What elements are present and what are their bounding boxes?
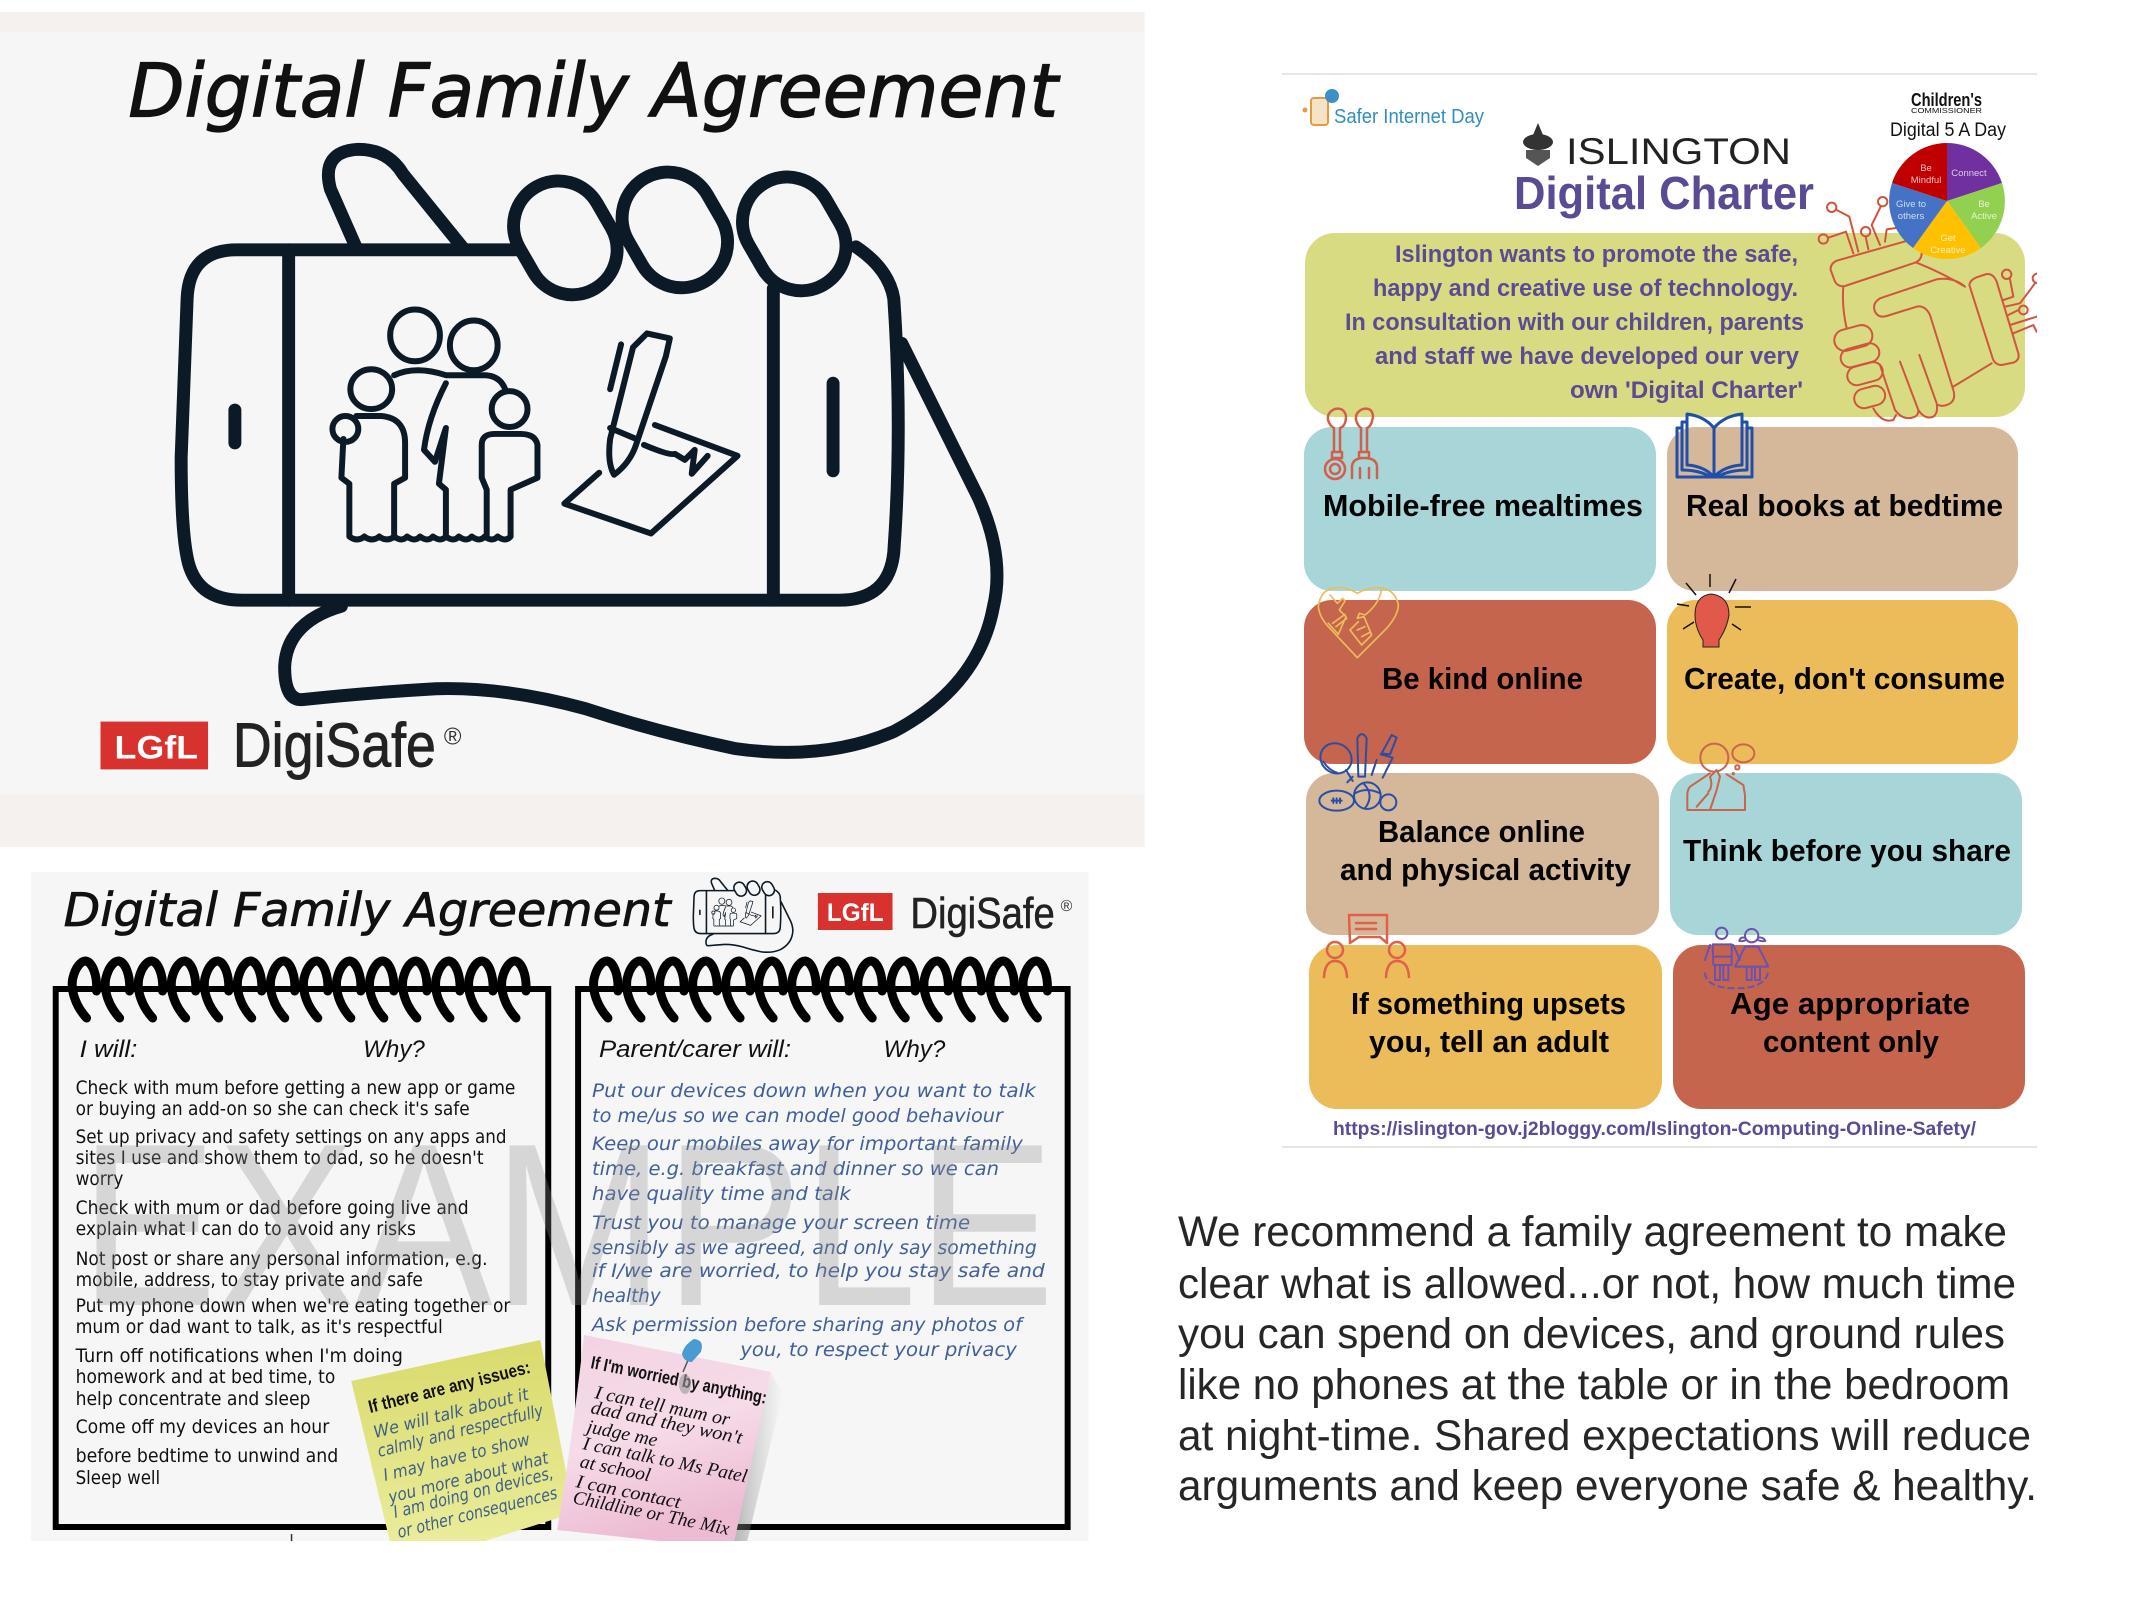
card: Create, don't consume — [1667, 600, 2018, 764]
text: child promises: mum or dad want to talk, as it's respectful — [76, 1316, 443, 1338]
text block: recommendation paragraph — [1178, 1208, 2037, 1510]
logo: ISLINGTON wordmark: ISLINGTON — [1566, 131, 1791, 172]
icon: spoon and fork — [1325, 409, 1377, 479]
logo: LGfL badge — [101, 722, 208, 769]
heading: sheet title: Digital Family Agreement — [64, 883, 673, 937]
icon part: thumb — [328, 149, 463, 248]
text: banner lines: own 'Digital Charter' — [1570, 377, 1803, 404]
card: Think before you share: Think before you share — [1683, 833, 2011, 868]
card: Age appropriate content only — [1673, 945, 2025, 1109]
card: Real books at bedtime: Real books at bedtime — [1686, 488, 2003, 523]
text: child promises: Put my phone down when we're eating together or — [76, 1295, 511, 1317]
pie slice: Be Active: Be — [1978, 199, 1990, 210]
text: pink note lines: dad and they won't — [589, 1397, 745, 1449]
decorative coil: parent notepad spiral — [594, 961, 1047, 1018]
text block: recommendation paragraph: We recommend a family agreement to make — [1178, 1208, 2007, 1256]
icon part: pen and signed paper — [564, 333, 738, 533]
text: right why header: Why? — [884, 1036, 946, 1063]
text: child promises: Check with mum or dad before going live and — [76, 1197, 469, 1219]
panel: top agreement poster — [0, 12, 1145, 847]
logo: Children's Commissioner: COMMISSIONER — [1911, 108, 1982, 115]
note: yellow sticky note — [351, 1340, 574, 1542]
logo: small registered mark: ® — [1061, 898, 1073, 915]
logo: Children's Commissioner: Children's — [1911, 90, 1982, 110]
panel: example agreement sheet — [31, 872, 1089, 1542]
icon: open book — [1677, 414, 1752, 477]
link: blog URL: https://islington-gov.j2bloggy.com/Islington-Computing-Online-Safety/ — [1333, 1119, 1977, 1140]
pie slice: Give to others — [1889, 183, 1947, 248]
text: parent promises: if I/we are worried, to help you stay safe and — [592, 1260, 1046, 1282]
text: pink note lines — [571, 1382, 749, 1540]
pie slice: Be Mindful: Be — [1920, 163, 1932, 174]
text: yellow note heading: If there are any issues: — [366, 1357, 532, 1417]
card: If something upsets you, tell an adult — [1309, 945, 1662, 1109]
card: Balance online and physical activity: Balance online — [1378, 814, 1585, 849]
icon: hand holding phone with family and signature — [181, 149, 997, 752]
icon: Islington crest — [1523, 123, 1553, 166]
text: pink note lines: at school — [578, 1451, 652, 1486]
pie slice: Get Creative: Creative — [1930, 245, 1966, 256]
text: child promises — [75, 1077, 515, 1489]
watermark: EXAMPLE: EXAMPLE — [80, 1096, 1055, 1355]
logo: DigiSafe wordmark: DigiSafe — [233, 711, 436, 780]
text: child promises: homework and at bed time, to — [76, 1366, 335, 1388]
text: yellow note lines: calmly and respectfully — [375, 1400, 546, 1461]
text block: recommendation paragraph: you can spend on devices, and ground rules — [1178, 1310, 2005, 1358]
text: Digital 5 A Day: Digital 5 A Day — [1890, 120, 2006, 141]
logo: small LGfL badge: LGfL — [827, 899, 884, 927]
panel: child notepad — [56, 961, 548, 1527]
icon: blue push pin — [679, 1339, 702, 1394]
logo: Children's Commissioner — [1912, 92, 1982, 113]
pie slice: Connect: Connect — [1951, 168, 1987, 179]
icon part: phone slots — [235, 383, 833, 471]
text block: recommendation paragraph: clear what is allowed...or not, how much time — [1178, 1260, 2016, 1308]
text: parent promises — [590, 1080, 1046, 1361]
text block: recommendation paragraph: at night-time. Shared expectations will reduce — [1178, 1412, 2031, 1460]
text: parent promises: time, e.g. breakfast and dinner so we can — [592, 1158, 999, 1180]
text: pink note lines: Childline or The Mix — [571, 1487, 732, 1540]
icon: two people talking — [1324, 915, 1409, 977]
text: parent promises: sensibly as we agreed, and only say something — [592, 1237, 1037, 1259]
text: child promises: before bedtime to unwind and — [76, 1445, 338, 1467]
text: Safer Internet Day: Safer Internet Day — [1334, 106, 1484, 128]
text: yellow note lines — [371, 1383, 559, 1542]
icon part: family figures — [332, 310, 537, 539]
icon part: phone body — [181, 247, 898, 600]
text: parent promises: Keep our mobiles away for important family — [592, 1133, 1024, 1155]
icon part: fingers — [497, 155, 862, 311]
text: parent promises: Put our devices down when you want to talk — [592, 1080, 1037, 1102]
text: child promises: Sleep well — [76, 1467, 160, 1489]
icon: thinking person — [1687, 744, 1754, 810]
pie slice: Get Creative: Get — [1940, 233, 1956, 244]
text: parent promises: Ask permission before sharing any photos of — [590, 1314, 1025, 1336]
text: child promises: Not post or share any personal information, e.g. — [76, 1248, 488, 1270]
text: pink note lines: I can contact — [573, 1471, 683, 1513]
logo: small DigiSafe wordmark: DigiSafe — [910, 889, 1055, 938]
text: yellow note lines: I am doing on devices, — [391, 1463, 555, 1522]
card: Think before you share — [1670, 773, 2022, 935]
text block: recommendation paragraph: arguments and keep everyone safe & healthy. — [1178, 1462, 2037, 1510]
text: child promises: sites I use and show them to dad, so he doesn't — [76, 1147, 484, 1169]
card: Mobile-free mealtimes: Mobile-free mealtimes — [1323, 488, 1643, 523]
pie slice: Be Mindful: Mindful — [1911, 175, 1941, 186]
icon: heart of hands — [1318, 588, 1398, 658]
logo: LGfL badge: LGfL — [114, 728, 198, 765]
chart: Digital 5 A Day pie — [1889, 143, 2005, 259]
card: Age appropriate content only: content only — [1763, 1024, 1940, 1059]
text: pink note lines: judge me — [582, 1416, 659, 1451]
heading: poster title: Digital Family Agreement — [128, 49, 1061, 134]
text: banner lines: In consultation with our children, parents — [1345, 309, 1804, 336]
card: Create, don't consume: Create, don't consume — [1684, 661, 2005, 696]
heading: Digital Charter: Digital Charter — [1514, 167, 1814, 219]
text: child promises: explain what I can do to avoid any risks — [76, 1218, 416, 1240]
pie slice: Be Mindful — [1892, 143, 1947, 201]
decorative: cut-off footer tick — [291, 1534, 293, 1541]
text: yellow note lines: We will talk about it — [371, 1383, 532, 1442]
logo: registered mark: ® — [444, 723, 462, 750]
card: If something upsets you, tell an adult: If something upsets — [1351, 986, 1626, 1021]
panel: Islington digital charter — [1282, 74, 2042, 1147]
text: pink note lines: I can talk to Ms Patel — [580, 1433, 749, 1487]
text: banner lines — [1345, 241, 1804, 404]
text: parent promises: healthy — [592, 1285, 661, 1307]
panel: parent notepad — [578, 961, 1068, 1527]
text: child promises: or buying an add-on so she can check it's safe — [76, 1098, 470, 1120]
text: child promises: worry — [76, 1168, 123, 1190]
text: parent promises: Trust you to manage your screen time — [592, 1212, 970, 1234]
icon: circuit handshake — [1819, 197, 2042, 421]
card: If something upsets you, tell an adult: you, tell an adult — [1369, 1024, 1609, 1059]
text: child promises: mobile, address, to stay private and safe — [76, 1269, 423, 1291]
text: yellow note lines: or other consequences — [395, 1482, 559, 1542]
icon: small hand holding phone — [693, 878, 793, 952]
text: pink note heading: If I'm worried by anything: — [589, 1352, 769, 1408]
card: Age appropriate content only: Age appropriate — [1730, 986, 1970, 1021]
text: child promises: Come off my devices an hour — [76, 1416, 330, 1438]
text: yellow note lines: I may have to show — [381, 1429, 532, 1485]
panel: charter banner — [1305, 233, 2025, 417]
card: Balance online and physical activity — [1306, 773, 1659, 935]
text: banner lines: and staff we have developed our very — [1375, 343, 1800, 370]
text: child promises: Check with mum before getting a new app or game — [76, 1077, 515, 1099]
text: parent promises: have quality time and talk — [592, 1183, 852, 1205]
icon: Safer Internet Day device — [1302, 89, 1339, 125]
icon part: palm and wrist — [285, 343, 997, 752]
pie slice: Be Active — [1947, 183, 2005, 248]
text: banner lines: Islington wants to promote the safe, — [1395, 241, 1798, 268]
icon: sports equipment — [1314, 734, 1397, 811]
text: child promises: Set up privacy and safety settings on any apps and — [76, 1126, 506, 1148]
pie slice: Give to others: Give to — [1896, 199, 1926, 210]
logo: small LGfL badge — [818, 893, 893, 930]
text block: recommendation paragraph: like no phones at the table or in the bedroom — [1178, 1361, 2010, 1409]
pie slice: Get Creative — [1913, 201, 1981, 259]
icon: light bulb — [1677, 574, 1751, 647]
card: Be kind online: Be kind online — [1382, 661, 1583, 696]
text: child promises: help concentrate and sleep — [76, 1388, 310, 1410]
icon part: phone screen dividers — [289, 250, 773, 600]
text: parent promises: to me/us so we can model good behaviour — [592, 1105, 1004, 1127]
decorative coil: child notepad spiral — [72, 961, 526, 1018]
text: parent promises: you, to respect your privacy — [739, 1339, 1018, 1361]
text: yellow note lines: you more about what — [385, 1447, 551, 1507]
text: child promises: Turn off notifications when I'm doing — [75, 1345, 403, 1367]
note: pink sticky note — [557, 1335, 783, 1541]
icon: boy and girl — [1705, 928, 1768, 988]
text: I will header: I will: — [80, 1036, 137, 1063]
text: parent header: Parent/carer will: — [599, 1036, 791, 1063]
card: Balance online and physical activity: and physical activity — [1340, 852, 1632, 887]
pie slice: Give to others: others — [1898, 211, 1924, 222]
text: left why header: Why? — [363, 1036, 426, 1063]
pie slice: Be Active: Active — [1971, 211, 1997, 222]
card: Real books at bedtime — [1667, 427, 2018, 591]
text: banner lines: happy and creative use of technology. — [1373, 275, 1798, 302]
text: pink note lines: I can tell mum or — [592, 1382, 732, 1431]
card: Mobile-free mealtimes — [1304, 427, 1656, 591]
card: Be kind online — [1304, 600, 1656, 764]
